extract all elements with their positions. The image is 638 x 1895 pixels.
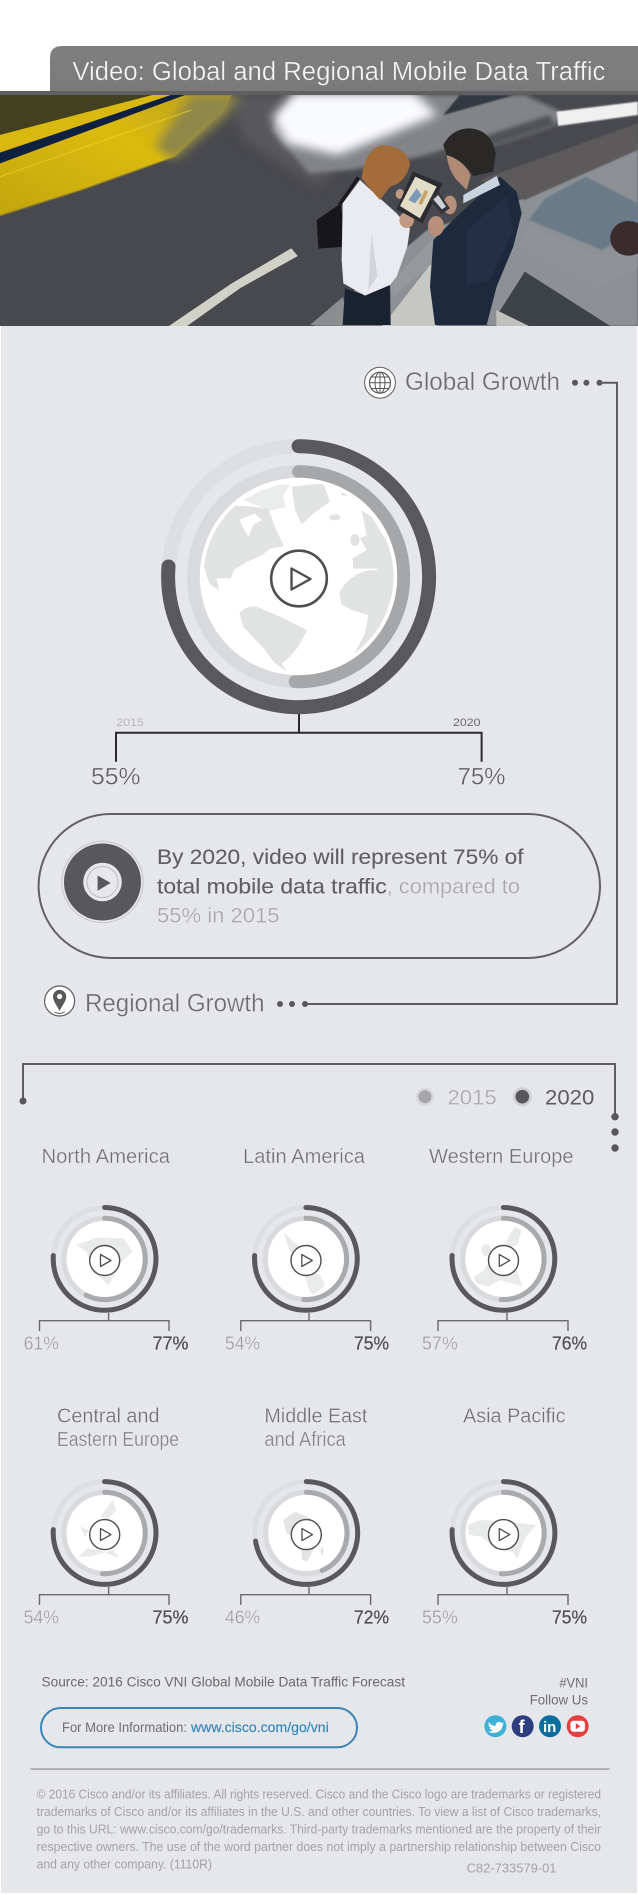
legal text: © 2016 Cisco and/or its affiliates. All rights reserved. Cisco and the Cisco logo are trademarks or registered [37, 1787, 601, 1801]
jeans [343, 285, 391, 325]
icon: globe [365, 367, 395, 398]
more information pill: www.cisco.com/go/vni [190, 1719, 329, 1735]
global chart bracket with labels [91, 714, 506, 790]
hero photo: two people with tablet on a busy street [0, 93, 638, 326]
curb stone [390, 238, 433, 297]
region: Central and Eastern Europe: Central and [57, 1404, 160, 1427]
donut chart: 61% to 77% [53, 1208, 156, 1310]
social hashtag and follow text: #VNI [559, 1674, 588, 1690]
region: Middle East and Africa: 46% [225, 1607, 260, 1627]
donut chart: 54% to 75% [254, 1208, 357, 1310]
icon: play button [271, 551, 327, 606]
road marking [169, 248, 298, 326]
global chart bracket with labels: 55% [91, 763, 140, 790]
donut chart: 55% to 75% [452, 1482, 555, 1584]
callout text: 55% in 2015 [157, 905, 280, 928]
region: Latin America: 75% [354, 1333, 389, 1353]
callout text: , compared to [387, 875, 520, 898]
bag [316, 204, 342, 249]
section heading: Regional Growth: Regional Growth [85, 990, 264, 1018]
region: Western Europe [422, 1145, 587, 1353]
section heading: Global Growth: Global Growth [405, 368, 560, 396]
region: Latin America [225, 1145, 389, 1353]
callout text [157, 846, 524, 928]
legal text: trademarks of Cisco and/or its affiliates in the U.S. and other countries. To view a list of Cisco trademarks, [37, 1805, 601, 1819]
region: Middle East and Africa: Middle East [264, 1404, 368, 1427]
globe [200, 478, 397, 675]
region: Western Europe: 57% [422, 1333, 458, 1353]
silver car [272, 95, 561, 173]
region: Central and Eastern Europe: 75% [152, 1607, 188, 1627]
global chart bracket with labels: 75% [458, 763, 506, 790]
shirt [342, 180, 410, 296]
icon: twitter [484, 1715, 506, 1737]
global donut chart: 55% in 2015, 75% in 2020 [168, 446, 429, 707]
coat [430, 177, 522, 325]
legal text: and any other company. (1110R) [37, 1857, 212, 1871]
region: North America: 77% [152, 1333, 188, 1353]
region: Asia Pacific: 75% [552, 1607, 587, 1627]
region: Asia Pacific: Asia Pacific [463, 1404, 566, 1427]
taxi [0, 95, 232, 218]
region: Central and Eastern Europe [24, 1404, 188, 1627]
social hashtag and follow text [530, 1674, 588, 1707]
tablet [397, 172, 443, 223]
footer divider [30, 1768, 610, 1770]
global chart bracket with labels: 2020 [453, 717, 480, 729]
pavement [313, 143, 638, 326]
donut chart: 46% to 72% [255, 1482, 358, 1584]
callout pill: key statistic [39, 814, 600, 958]
more information pill: For More Information: [62, 1719, 187, 1735]
region: North America: North America [42, 1145, 171, 1168]
hand [399, 212, 414, 228]
legal text: respective owners. The use of the word partner does not imply a partnership relationship between Cisco [37, 1840, 601, 1854]
legend: 2015 and 2020: 2015 [448, 1086, 497, 1109]
head [447, 155, 471, 190]
title banner [0, 46, 638, 95]
legend: 2015 and 2020: 2020 [545, 1086, 594, 1109]
document code: C82-733579-01 [467, 1861, 557, 1875]
icon: facebook: f [519, 1717, 526, 1737]
region: Asia Pacific: 55% [422, 1607, 458, 1627]
street scene: taxi, car, pavement [0, 93, 638, 326]
inner arc 2015 [194, 472, 404, 682]
region: Latin America: Latin America [243, 1145, 366, 1168]
region: Middle East and Africa: 72% [354, 1607, 389, 1627]
regional section frame [20, 1064, 619, 1152]
region: Middle East and Africa: and Africa [264, 1428, 346, 1451]
social media icons [484, 1715, 589, 1737]
outer arc 2020 [168, 446, 429, 707]
region: North America [24, 1145, 188, 1353]
callout text: By 2020, video will represent 75% of [157, 846, 524, 869]
callout text: total mobile data traffic [157, 875, 387, 898]
donut chart: 54% to 75% [53, 1482, 156, 1584]
icon: map pin [45, 986, 75, 1016]
region: North America: 61% [24, 1333, 59, 1353]
global chart bracket with labels: 2015 [116, 717, 144, 729]
connector: global to regional [277, 380, 617, 1007]
more information pill [41, 1708, 357, 1747]
region: Latin America: 54% [225, 1333, 260, 1353]
title banner: Video: Global and Regional Mobile Data Traffic [72, 58, 606, 86]
icon: linkedin: in [543, 1719, 556, 1736]
collar [463, 176, 500, 203]
region: Central and Eastern Europe: 54% [24, 1607, 59, 1627]
legal text [37, 1787, 601, 1871]
source line: Source: 2016 Cisco VNI Global Mobile Data Traffic Forecast [42, 1674, 405, 1690]
donut chart: 57% to 76% [452, 1208, 555, 1310]
region: Central and Eastern Europe: Eastern Europe [57, 1428, 179, 1451]
region: Western Europe: Western Europe [429, 1145, 574, 1168]
region: Middle East and Africa [225, 1404, 389, 1627]
legend: 2015 and 2020 [416, 1086, 594, 1109]
legal text: go to this URL: www.cisco.com/go/trademarks. Third-party trademarks mentioned are the property of their [37, 1822, 601, 1836]
hair [362, 145, 410, 200]
social hashtag and follow text: Follow Us [530, 1691, 588, 1707]
region: Western Europe: 76% [552, 1333, 587, 1353]
people [310, 128, 522, 325]
hands and phone [428, 216, 444, 236]
icon: dark play disc [62, 841, 143, 923]
icon: youtube [567, 1715, 589, 1737]
region: Asia Pacific [422, 1404, 587, 1627]
